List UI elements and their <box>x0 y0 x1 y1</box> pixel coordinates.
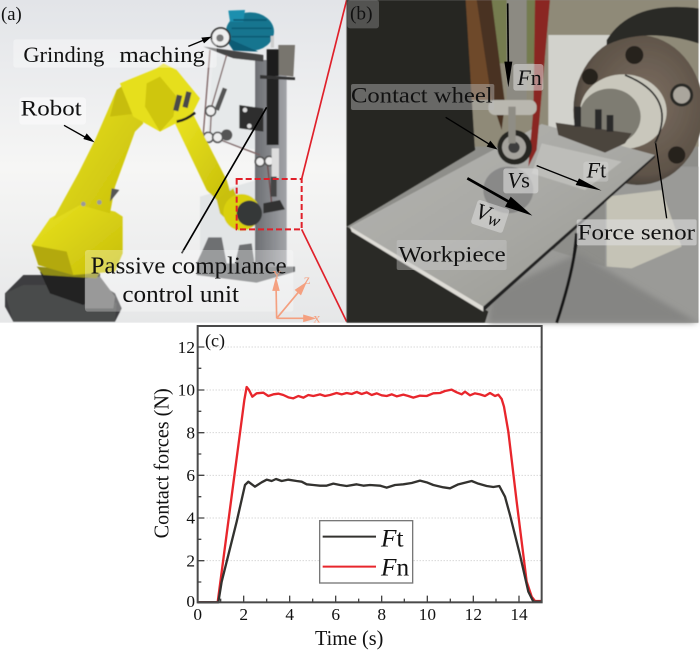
arrow: compliance unit pointer <box>182 107 267 253</box>
label: Robot: Robot <box>21 96 82 121</box>
icon: force sensor fixture <box>573 7 700 185</box>
label: Vs <box>503 167 538 193</box>
label: Workpiece: Workpiece <box>398 242 506 267</box>
label: (b) <box>347 0 379 28</box>
y axis labels: 6 <box>186 466 195 485</box>
y axis labels: 8 <box>186 423 195 442</box>
y axis labels: 12 <box>178 338 195 357</box>
icon: XYZ axes: Y <box>273 267 282 281</box>
label: Fn: Fn <box>516 65 542 90</box>
transparent stand panel <box>200 57 257 277</box>
x axis labels: 0 <box>193 605 202 624</box>
icon: XYZ axes: z <box>304 273 310 288</box>
label: Vw <box>470 198 510 233</box>
icon: cable <box>557 233 577 323</box>
arrow: Ft <box>537 166 602 191</box>
x axis labels: 4 <box>285 605 294 624</box>
label: Grinding machine <box>13 39 217 68</box>
x axis labels: 8 <box>377 605 386 624</box>
x axis labels: 14 <box>510 605 528 624</box>
icon: workpiece plate <box>350 124 655 312</box>
label: (b): (b) <box>350 3 373 24</box>
y axis labels: 10 <box>178 381 195 400</box>
y axis labels <box>178 338 195 611</box>
icon: clamp <box>556 107 632 153</box>
arrow: contact wheel pointer <box>446 117 498 150</box>
label: Passive compliance control unit: Passive compliance <box>91 252 287 279</box>
connector lines: zoom to panel b <box>302 0 347 322</box>
axis ticks <box>198 347 519 602</box>
y axis labels: 2 <box>186 551 195 570</box>
x axis title: Time (s) <box>315 628 383 650</box>
label: Force senor: Force senor <box>578 219 695 244</box>
label: Vw: w <box>485 208 503 231</box>
label: (a): (a) <box>1 4 22 25</box>
arrow: force sensor pointer <box>656 143 667 218</box>
y axis labels: 0 <box>186 592 195 611</box>
label: (c): (c) <box>205 331 225 352</box>
x axis labels: 10 <box>419 605 436 624</box>
panel: (b) photograph of grinding setup <box>347 0 700 323</box>
x axis labels: 12 <box>465 605 482 624</box>
x axis labels <box>193 605 528 624</box>
arrow: grinding machine pointer <box>188 37 212 46</box>
icon: robot base <box>5 272 122 322</box>
icon: XYZ axes <box>273 267 320 327</box>
callout box: zoom region <box>237 179 302 229</box>
chart grid lines <box>198 347 542 561</box>
icon: grinding motor <box>211 10 274 52</box>
x axis labels: 2 <box>239 605 248 624</box>
panel: (a) robot grinding system <box>0 0 347 327</box>
y axis labels: 4 <box>186 509 195 528</box>
y axis title: Contact forces (N) <box>151 388 173 538</box>
arrow: robot pointer <box>64 125 95 142</box>
x axis labels: 6 <box>331 605 340 624</box>
label: Passive compliance control unit: control unit <box>122 281 239 308</box>
chart axes frame <box>198 326 542 602</box>
icon: grinding machine column <box>197 45 295 283</box>
label: Contact wheel: Contact wheel <box>351 83 493 108</box>
chart legend: Ft <box>380 524 404 552</box>
label: Vs: Vs <box>507 167 530 192</box>
arrow: Fn <box>504 3 512 87</box>
label: Grinding machine: Grinding <box>23 42 104 67</box>
series: Ft <box>198 479 542 602</box>
icon: contact wheel and belt <box>477 0 550 167</box>
label: Passive compliance control unit <box>85 250 293 312</box>
series: Fn <box>198 387 542 602</box>
arrow: Vw <box>467 178 532 216</box>
label: Grinding machine: maching <box>119 42 205 67</box>
chart legend: Fn <box>380 554 409 582</box>
chart legend <box>320 521 413 583</box>
label: Ft: Ft <box>586 158 606 183</box>
icon: yellow robot arm <box>32 63 262 278</box>
label: Vw: V <box>473 198 493 226</box>
photo background <box>347 0 698 323</box>
icon: XYZ axes: x <box>313 312 320 327</box>
panel: (c) contact forces line chart <box>151 326 542 650</box>
